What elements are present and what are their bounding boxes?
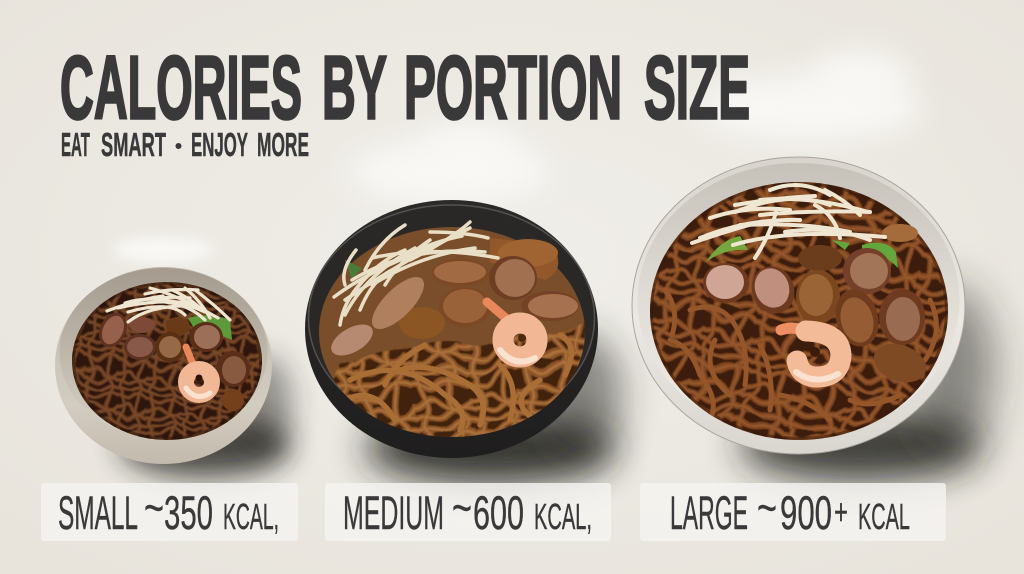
label: medium: MEDIUM xyxy=(343,486,444,539)
title: CALORIES xyxy=(60,38,302,138)
bowl shadows xyxy=(120,285,994,484)
label: small: ~ xyxy=(144,481,164,534)
large bowl xyxy=(632,157,965,454)
bean sprouts: small xyxy=(107,288,230,322)
shrimp: small xyxy=(186,347,212,397)
toppings: large xyxy=(703,224,932,389)
label: large: ~ xyxy=(757,481,777,534)
bowl body: small xyxy=(55,267,272,464)
label: small: KCAL, xyxy=(223,496,279,537)
label: large: KCAL xyxy=(858,496,910,537)
label: medium: ~ xyxy=(452,481,472,534)
title: BY xyxy=(322,38,387,138)
subtitle xyxy=(61,126,309,163)
steam clouds xyxy=(113,52,920,263)
subtitle: EAT xyxy=(61,126,90,163)
label: medium: 600 xyxy=(473,486,524,539)
title: SIZE xyxy=(644,38,750,138)
noodles: large xyxy=(650,182,948,440)
subtitle: SMART xyxy=(101,126,166,163)
title: PORTION xyxy=(404,38,622,138)
toppings: small xyxy=(94,308,250,411)
toppings: medium xyxy=(326,238,579,362)
small bowl xyxy=(55,267,275,464)
bean sprouts: medium xyxy=(334,222,498,325)
noodles: medium xyxy=(333,322,585,437)
subtitle: MORE xyxy=(257,126,309,163)
bean sprouts: large xyxy=(692,185,885,258)
label: large: LARGE xyxy=(670,486,748,539)
shrimp: large xyxy=(781,328,841,380)
noodles: small xyxy=(72,282,262,440)
label: large xyxy=(640,481,946,541)
bowl body: large xyxy=(632,157,965,454)
shrimp: medium xyxy=(487,302,537,362)
label: medium: KCAL, xyxy=(534,496,592,537)
label: large: + xyxy=(834,491,848,532)
label: small: 350 xyxy=(164,486,213,539)
subtitle: ENJOY xyxy=(191,126,248,163)
title xyxy=(60,38,750,138)
medium bowl xyxy=(305,200,598,458)
label: medium xyxy=(325,481,611,541)
broth: medium xyxy=(319,227,585,437)
label: small xyxy=(41,481,298,541)
label: large: 900 xyxy=(780,486,832,539)
label: small: SMALL xyxy=(58,486,138,539)
bowl body: medium xyxy=(305,200,598,458)
